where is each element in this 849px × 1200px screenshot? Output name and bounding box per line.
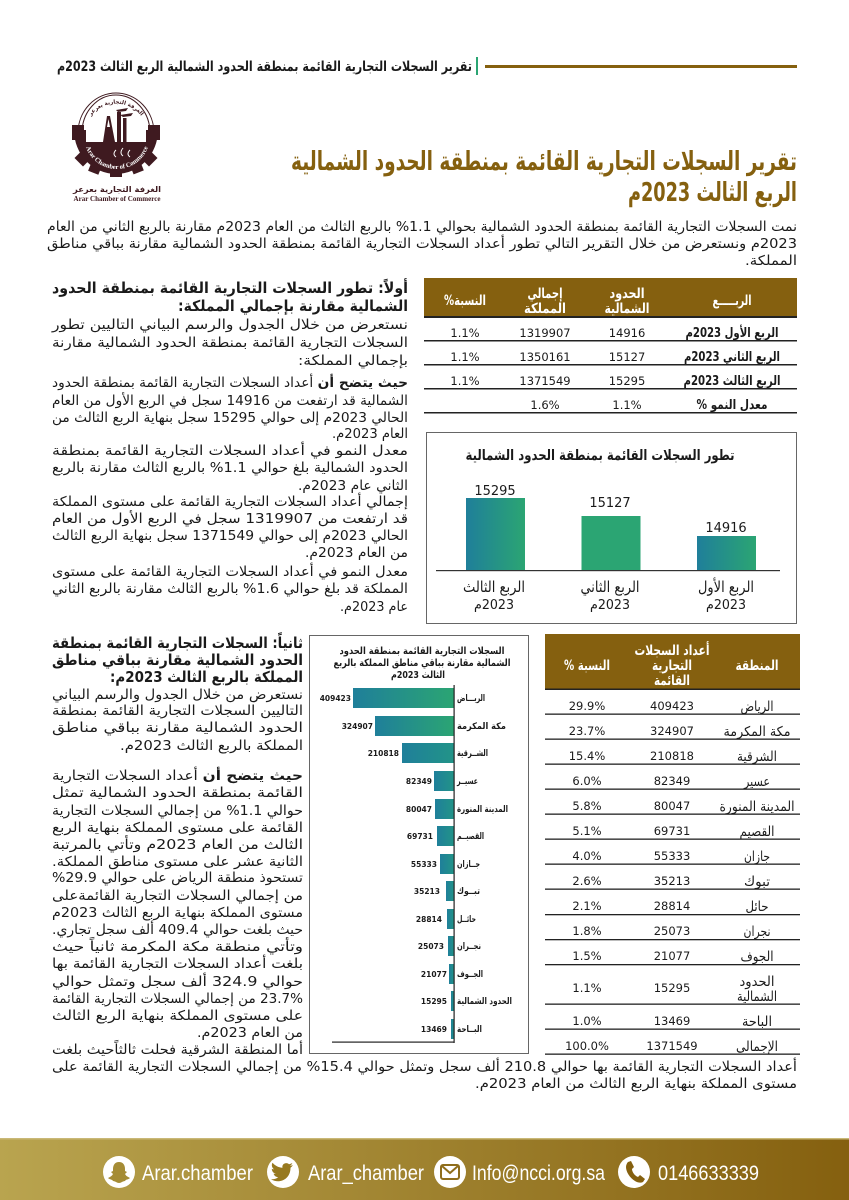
- table: regions: 23.7%: [569, 724, 605, 738]
- section one text: المملكة قد بلغ حوالي 1.6% بالربع الثالث مقارنة بالربع الثاني: [52, 581, 408, 597]
- icon: twitter: [267, 1156, 299, 1188]
- section two heading: المملكة بالربع الثالث 2023م:: [110, 668, 303, 686]
- section two text: حوالي 1.1% من إجمالي السجلات التجارية: [52, 803, 303, 819]
- bar chart title: الشمالية مقارنة بباقي مناطق المملكة بالربع: [334, 658, 510, 669]
- table: regions: 100.0%: [565, 1039, 609, 1053]
- table: regions: القصيم: [740, 824, 774, 840]
- running header: [57, 57, 797, 75]
- section one text: السجلات التجارية القائمة بمنطقة الحدود الشمالية مقارنة: [52, 335, 408, 351]
- table: regions: 4.0%: [572, 849, 602, 863]
- section one text: قد ارتفعت من 1319907 سجل في الربع الأول من العام: [52, 510, 408, 527]
- column chart: northern borders registers: 15127: [589, 496, 631, 511]
- section two text: نستعرض من خلال الجدول والرسم البياني: [52, 687, 303, 703]
- table: regions: 2.6%: [572, 874, 602, 888]
- section one text: عام 2023م.: [340, 599, 408, 615]
- table: regions: الحدود: [740, 974, 774, 990]
- table: regions: حائل: [746, 899, 768, 915]
- table: regions: 6.0%: [572, 774, 602, 788]
- bar chart: regions: نجــران: [457, 942, 481, 952]
- section two text: وتأتي منطقة مكة المكرمة ثانياً حيث: [52, 936, 303, 955]
- section two text: على مستوى المملكة بنهاية الربع الثالث: [52, 1008, 303, 1024]
- section two closing text: [52, 1057, 797, 1092]
- table: regions: 210818: [650, 749, 694, 763]
- bar chart: regions: مكة المكرمة: [457, 722, 506, 732]
- section two text: المملكة بالربع الثالث 2023م.: [120, 738, 303, 754]
- icon: email: [434, 1156, 466, 1188]
- section two text: الحدود الشمالية مقارنة بباقي مناطق: [52, 720, 303, 736]
- bar chart: regions: تبــوك: [457, 887, 480, 897]
- table: regions: النسبة %: [564, 658, 610, 674]
- table: quarterly registers: الربع الثالث 2023م: [684, 374, 780, 389]
- logo: Arar Chamber of Commerce: Arar Chamber of Commerce: [74, 195, 160, 203]
- bar chart: regions: 55333: [411, 860, 437, 869]
- section one text: الحالي 2023م إلى حوالي 1371549 سجل بنهاية الربع الثالث: [52, 528, 408, 544]
- table: regions: 69731: [654, 824, 690, 838]
- column chart: northern borders registers: 2023م: [590, 598, 630, 613]
- table: regions: الإجمالي: [736, 1039, 778, 1055]
- section two heading: [52, 632, 303, 686]
- table: regions: 5.8%: [572, 799, 602, 813]
- table: quarterly registers: 1.1%: [450, 374, 480, 388]
- column chart: northern borders registers: 2023م: [474, 598, 514, 613]
- footer contact band: Info@ncci.org.sa: [472, 1162, 605, 1185]
- column chart: northern borders registers: 14916: [705, 521, 747, 536]
- table: regions: 21077: [654, 949, 690, 963]
- table: regions: الشمالية: [737, 989, 777, 1005]
- section two text: حيث يتضح أن أعداد السجلات التجارية: [52, 766, 303, 784]
- bar chart: regions: 35213: [414, 887, 440, 896]
- section one text: معدل النمو في أعداد السجلات التجارية القائمة بمنطقة: [52, 441, 408, 459]
- table: regions: 25073: [654, 924, 690, 938]
- table: regions: عسير: [743, 774, 770, 790]
- section one text: بإجمالي المملكة:: [298, 353, 408, 369]
- table: regions: الباحة: [742, 1014, 772, 1030]
- intro paragraph: نمت السجلات التجارية القائمة بمنطقة الحدود الشمالية بحوالي 1.1% بالربع الثالث من العام 2023م مقارنة بالربع الثاني من العام: [47, 219, 797, 235]
- title: [291, 147, 797, 208]
- section one text: العام 2023م.: [332, 426, 408, 442]
- table: quarterly registers: المملكة: [524, 301, 566, 317]
- footer contact band: Arar.chamber: [142, 1162, 253, 1185]
- section two text: القائمة بمنطقة الحدود الشمالية تمثل: [52, 785, 303, 801]
- table: quarterly registers: 1.1%: [450, 326, 480, 340]
- table: regions: 2.1%: [572, 899, 602, 913]
- footer contact band: Arar_chamber: [308, 1162, 424, 1185]
- footer contact band: 0146633339: [658, 1162, 759, 1185]
- logo: Arar Chamber of Commerce: [72, 92, 161, 203]
- section one text: الحالي 2023م إلى حوالي 15295 سجل بنهاية الربع الثالث من: [52, 410, 408, 426]
- bar chart: regions: الشــرقية: [457, 749, 488, 759]
- intro paragraph: المملكة.: [745, 253, 797, 269]
- section two text: الثالث من العام 2023م وتأتي بالمرتبة: [52, 835, 303, 853]
- table: regions: الجوف: [740, 949, 774, 965]
- column chart: northern borders registers: [426, 432, 796, 624]
- section two text: القائمة على مستوى المملكة بنهاية الربع: [52, 820, 303, 836]
- table: quarterly registers: 14916: [609, 326, 645, 340]
- table: regions: المنطقة: [736, 658, 778, 674]
- section two text: 23.7% من إجمالي السجلات التجارية القائمة: [52, 991, 303, 1007]
- table: regions: 1.8%: [572, 924, 602, 938]
- bar chart: regions: 82349: [406, 777, 432, 786]
- section two text: بلغت أعداد السجلات التجارية القائمة بها: [52, 954, 303, 972]
- bar chart title: الثالث 2023م: [391, 670, 445, 681]
- logo: Arar Chamber of Commerce: الغرفة التجارية بعرعر: [90, 99, 144, 117]
- table: regions: 324907: [650, 724, 694, 738]
- section two text: الثانية عشر على مستوى مناطق المملكة.: [52, 854, 303, 870]
- section two text: أما المنطقة الشرقية فحلت ثالثاًحيث بلغت: [52, 1039, 303, 1058]
- table: regions: المدينة المنورة: [720, 799, 794, 815]
- table: regions: نجران: [744, 924, 770, 940]
- table: regions: 35213: [654, 874, 690, 888]
- section one text: الشمالية قد ارتفعت من 14916 سجل في الربع الأول من العام: [52, 392, 408, 409]
- section one text: من العام 2023م.: [305, 545, 408, 561]
- section one heading: أولاً: تطور السجلات التجارية القائمة بمنطقة الحدود: [52, 278, 408, 297]
- table: quarterly registers: 15295: [609, 374, 645, 388]
- section two text: مستوى المملكة بنهاية الربع الثالث 2023م: [52, 905, 303, 921]
- table: quarterly registers: 15127: [609, 350, 645, 364]
- table: regions: 15295: [654, 981, 690, 995]
- section two text: من إجمالي السجلات التجارية القائمةعلى: [52, 888, 303, 904]
- table: regions: الرياض: [740, 699, 774, 715]
- section one heading: الشمالية مقارنة بإجمالي المملكة:: [178, 297, 408, 315]
- table: quarterly registers: الربـــــع: [712, 293, 752, 309]
- section two closing text: مستوى المملكة بنهاية الربع الثالث من العام 2023م.: [475, 1076, 797, 1092]
- table: quarterly registers: الربع الثاني 2023م: [684, 350, 780, 365]
- column chart: northern borders registers: الربع الثاني: [580, 578, 640, 597]
- section two closing text: أعداد السجلات التجارية القائمة بها حوالي 210.8 ألف سجل وتمثل حوالي 15.4% من إجمالي السجلات التجارية القائمة على: [52, 1057, 797, 1075]
- section two text: حيث بلغت حوالي 409.4 ألف سجل تجاري.: [52, 920, 303, 938]
- table: quarterly registers: 1.1%: [612, 398, 642, 412]
- section one text: نستعرض من خلال الجدول والرسم البياني التاليين تطور: [51, 317, 408, 333]
- section one text: الحدود الشمالية بلغ حوالي 1.1% بالربع الثالث مقارنة بالربع: [52, 460, 408, 476]
- section one text: معدل النمو في أعداد السجلات التجارية القائمة على مستوى: [52, 562, 408, 580]
- table: regions: 82349: [654, 774, 690, 788]
- bar chart: regions: البــاحة: [457, 1025, 482, 1035]
- section one text: إجمالي أعداد السجلات التجارية القائمة على مستوى المملكة: [52, 492, 408, 510]
- table: quarterly registers: النسبة%: [444, 293, 486, 309]
- table: regions: 80047: [654, 799, 690, 813]
- bar chart: regions: 80047: [406, 805, 432, 814]
- table: quarterly registers: الشمالية: [604, 301, 650, 317]
- section two text: من العام 2023م.: [197, 1025, 303, 1041]
- bar chart: regions: المدينة المنورة: [457, 805, 508, 815]
- icon: phone: [618, 1156, 650, 1188]
- title: الربع الثالث 2023م: [628, 178, 797, 208]
- icon: snapchat: [103, 1156, 135, 1188]
- bar chart: regions: الريـــاض: [457, 694, 485, 704]
- table: regions: التجارية: [652, 658, 692, 674]
- section two text: [52, 632, 303, 1058]
- table: regions: 29.9%: [569, 699, 605, 713]
- section one heading: [52, 278, 408, 315]
- table: quarterly registers: معدل النمو %: [696, 398, 768, 413]
- table: regions: تبوك: [744, 874, 770, 890]
- table: regions: 1.5%: [572, 949, 602, 963]
- logo: Arar Chamber of Commerce: Arar Chamber of Commerce: [86, 146, 148, 169]
- bar chart: regions: [310, 636, 528, 1054]
- section two heading: ثانياً: السجلات التجارية القائمة بمنطقة: [52, 632, 303, 652]
- footer contact band: [0, 1138, 849, 1200]
- table: regions: القائمة: [654, 673, 690, 689]
- section two heading: الحدود الشمالية مقارنة بباقي مناطق: [52, 651, 303, 669]
- bar chart: regions: 28814: [416, 915, 442, 924]
- logo: Arar Chamber of Commerce: الغرفة التجارية بعرعر: [72, 185, 161, 194]
- column chart: northern borders registers: الربع الأول: [698, 577, 754, 596]
- bar chart: regions: القصيــم: [457, 832, 484, 842]
- bar chart: regions: 25073: [418, 942, 444, 951]
- section one text: [51, 278, 408, 615]
- bar chart: regions: 409423: [320, 694, 351, 703]
- table: regions: 55333: [654, 849, 690, 863]
- bar chart: regions: 210818: [368, 749, 399, 758]
- bar chart: regions: جــازان: [457, 860, 480, 870]
- bar chart title: [334, 646, 510, 681]
- table: regions: 28814: [654, 899, 690, 913]
- intro paragraph: 2023م ونستعرض من خلال التقرير التالي تطور أعداد السجلات التجارية القائمة بمنطقة الحدود الشمالية مقارنة بباقي مناطق: [47, 234, 797, 252]
- table: quarterly registers: الربع الأول 2023م: [686, 324, 778, 341]
- table: regions: أعداد السجلات: [634, 641, 710, 659]
- table: regions: 15.4%: [569, 749, 605, 763]
- chart title: تطور السجلات القائمة بمنطقة الحدود الشمالية: [466, 448, 734, 464]
- bar chart title: السجلات التجارية القائمة بمنطقة الحدود: [340, 646, 504, 657]
- section one text: حيث يتضح أن أعداد السجلات التجارية القائمة بمنطقة الحدود: [52, 373, 408, 391]
- table: quarterly registers: 1350161: [519, 350, 571, 364]
- bar chart: regions: 69731: [407, 832, 433, 841]
- bar chart: regions: 21077: [421, 970, 447, 979]
- table: regions: 1371549: [646, 1039, 698, 1053]
- table: regions: جازان: [744, 849, 770, 865]
- section one text: الثاني عام 2023م.: [298, 478, 408, 494]
- table: regions: 13469: [654, 1014, 690, 1028]
- section two text: تستحوذ منطقة الرياض على حوالي 29.9%: [52, 870, 303, 886]
- table: quarterly registers: 1319907: [519, 326, 571, 340]
- table: regions: 1.0%: [572, 1014, 602, 1028]
- table: quarterly registers: 1.6%: [530, 398, 560, 412]
- column chart: northern borders registers: الربع الثالث: [463, 578, 525, 596]
- table: regions: 5.1%: [572, 824, 602, 838]
- table: regions: 409423: [650, 699, 694, 713]
- bar chart: regions: الحدود الشمالية: [457, 997, 512, 1007]
- section two text: حوالي 324.9 ألف سجل وتمثل حوالي: [52, 972, 303, 990]
- table: regions: مكة المكرمة: [724, 724, 790, 740]
- running header: تقرير السجلات التجارية القائمة بمنطقة الحدود الشمالية الربع الثالث 2023م: [57, 59, 472, 75]
- table: quarterly registers: [424, 278, 797, 414]
- table: quarterly registers: الحدود: [610, 286, 644, 302]
- table: quarterly registers: 1.1%: [450, 350, 480, 364]
- table: regions: 1.1%: [572, 981, 602, 995]
- section two text: التاليين السجلات التجارية القائمة بمنطقة: [52, 703, 303, 719]
- column chart: northern borders registers: 15295: [474, 484, 516, 499]
- column chart: northern borders registers: 2023م: [706, 598, 746, 613]
- table: quarterly registers: إجمالي: [528, 286, 562, 302]
- bar chart: regions: 13469: [421, 1025, 447, 1034]
- intro paragraph: [47, 219, 797, 269]
- bar chart: regions: 15295: [421, 997, 447, 1006]
- bar chart: regions: حائــل: [457, 915, 476, 925]
- bar chart: regions: الجــوف: [457, 970, 483, 980]
- bar chart: regions: عسيــر: [456, 777, 478, 787]
- bar chart: regions: 324907: [342, 722, 373, 731]
- table: regions: [545, 634, 800, 1055]
- table: quarterly registers: 1371549: [519, 374, 571, 388]
- table: regions: الشرقية: [737, 749, 777, 765]
